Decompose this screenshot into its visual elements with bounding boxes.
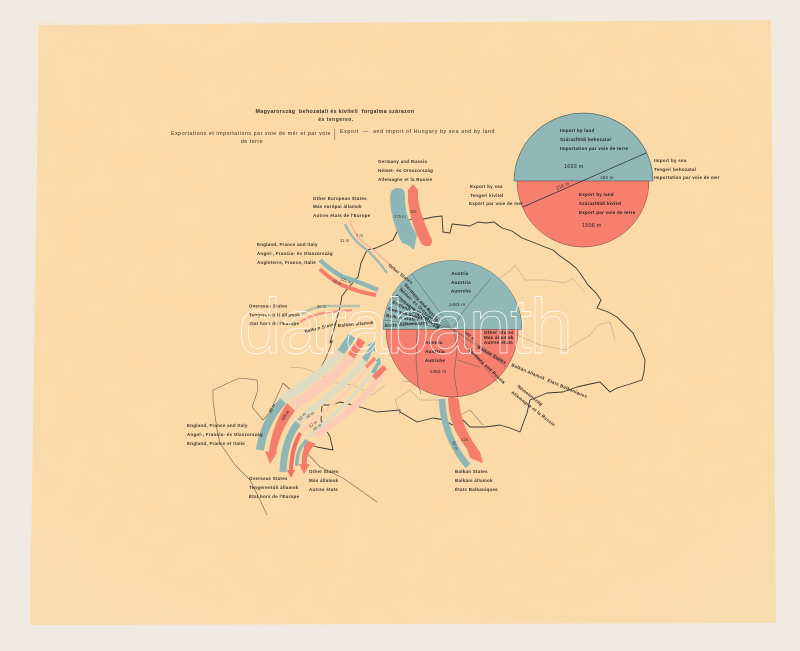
Allemagne exports radial label: Allemagne et la Russie — [510, 390, 557, 427]
title hungarian: és tengeren. — [318, 117, 354, 123]
England export — [265, 403, 295, 464]
flow values: 12 m — [308, 419, 319, 429]
Balkan States flows — [442, 397, 483, 466]
flow values: 62 m — [297, 411, 307, 422]
England, France, Italy import faded — [282, 350, 342, 400]
import flow — [442, 399, 468, 466]
label Overseas upper: Tengeren túli államok — [249, 312, 300, 318]
Balkan exports radial label: Balkán államok Etats Balkaniques — [511, 362, 588, 399]
Overseas import — [283, 423, 298, 472]
label Other States lower: Other States — [309, 469, 339, 474]
export by land label: 1506 m — [582, 223, 602, 229]
import by sea label: Tengeri behozatal — [654, 167, 696, 172]
label Other European States: Más európai államok — [313, 204, 362, 209]
export by land label: Export par voie de terre — [579, 210, 636, 215]
Austria import label — [449, 271, 471, 307]
Other States export label: Más államok — [484, 335, 514, 340]
title hungarian: Magyarország behozatali és kiviteli forgalma szárazon — [256, 109, 414, 115]
Other European States flows — [345, 220, 392, 273]
export flow — [320, 269, 376, 295]
Balkan left label: Balkan States — [304, 321, 337, 334]
flow values: 275 m — [394, 214, 406, 219]
label Overseas lower — [249, 476, 300, 499]
top arrow blue 2 — [362, 341, 375, 362]
import flow — [302, 306, 360, 314]
Overseas import faded — [297, 360, 365, 423]
Austria import label: Autriche — [451, 288, 471, 294]
map of Hungary and surroundings — [213, 216, 645, 515]
export by sea label — [469, 184, 523, 206]
import by sea label — [654, 158, 720, 180]
import by land label: Szárazföldi behozatal — [560, 137, 611, 142]
label Overseas lower: Tengerentúli államok — [249, 485, 299, 490]
label Balkan States lower: Balkáni államok — [455, 478, 493, 483]
label Other States lower: Más államok — [309, 478, 339, 483]
label Germany and Russia: Germany and Russia — [378, 159, 427, 164]
radial import labels: Etats Balkaniques — [385, 320, 428, 328]
top solid blue 1 — [341, 336, 352, 352]
import flow — [345, 224, 387, 273]
Balkan államok left label: Balkán államok — [338, 320, 374, 328]
Germany exports radial label: Németország — [516, 384, 544, 407]
lower flows solid ends — [260, 336, 385, 478]
main pie: imports from Austria and others, blue — [383, 261, 522, 330]
trade by land and sea pie — [514, 113, 653, 247]
Austria export label: Autriche — [425, 358, 445, 363]
import by sea label: Import by sea — [654, 158, 687, 163]
faded lower flows crossing the Adriatic — [282, 350, 383, 438]
title french — [171, 131, 331, 145]
radial export labels: Balkan States — [476, 345, 508, 365]
import flow — [320, 260, 378, 290]
import by sea label: Importation par voie de mer — [654, 175, 720, 180]
internal rivers — [290, 367, 385, 395]
chart content — [171, 109, 720, 515]
import by land label — [560, 128, 629, 180]
flow values: 30 m — [317, 304, 327, 309]
flow values: 45 m — [312, 422, 323, 432]
title french: de terre — [241, 139, 263, 145]
label Other European States: Other European States — [313, 196, 367, 201]
import by land label: Import by land — [560, 128, 595, 133]
radial import labels: Balkan States — [386, 313, 419, 323]
label Balkan States lower — [455, 469, 498, 492]
England, France, Italy export faded — [292, 354, 354, 407]
pie sector lines — [384, 274, 507, 397]
flow values: 85 m — [267, 402, 276, 413]
watermark darabanth: darabanth — [238, 282, 573, 370]
flow values: 151 — [410, 209, 418, 214]
label England France Italy upper: Angleterre, France, Italie — [257, 260, 316, 265]
Other States export faded — [315, 372, 383, 436]
export half — [517, 181, 649, 247]
Overseas States upper flows — [300, 306, 360, 322]
radial export labels — [463, 330, 508, 385]
England, France and Italy upper flows — [320, 260, 378, 295]
label England France Italy upper: England, France and Italy — [257, 242, 318, 247]
label England France Italy lower: Angol-, Francia- és Olaszország — [187, 432, 263, 437]
radial export labels: Germany and Russia — [467, 347, 506, 385]
export arrow to Germany and Russia, red — [408, 184, 432, 246]
Other States export — [299, 441, 316, 474]
top arrow blue 3 — [371, 357, 381, 374]
Other States import — [297, 440, 307, 466]
label Overseas upper: Overseas States — [249, 304, 288, 308]
label Germany and Russia: Allemagne et la Russie — [378, 177, 433, 182]
Austria import label: 1483 m — [449, 302, 465, 307]
Austria export label — [425, 340, 446, 374]
flow values: 7 m — [356, 233, 363, 238]
main pie labels — [385, 271, 514, 385]
top solid red 3 — [374, 367, 385, 378]
Balkan coast — [303, 443, 377, 502]
flow values: 121 m — [340, 276, 353, 285]
label England France Italy upper — [257, 242, 333, 265]
top solid red 1 — [351, 340, 362, 356]
other states upper radial label: Other States — [387, 263, 414, 285]
Other States import faded — [307, 364, 378, 438]
export by land label — [555, 181, 636, 229]
sea divider line — [523, 153, 646, 207]
export by land label: 216 m — [555, 181, 570, 191]
export by sea label: Export par voie de mer — [469, 201, 523, 206]
Other States export label — [484, 330, 514, 345]
Other States export label: Other States — [484, 330, 514, 335]
flow values: 96 m — [332, 278, 343, 286]
label Balkan States lower: Balkan States — [455, 469, 488, 474]
Other States export label: Autres états — [484, 340, 513, 345]
title french: Exportations et importations par voie de mér et par voie — [171, 131, 331, 137]
label Germany and Russia: Német- és Oroszország — [378, 168, 433, 173]
radial export labels: 162 m — [463, 330, 477, 342]
main pie: exports, red — [386, 330, 518, 397]
title english: Export — and import of Hungary by sea and by land — [340, 129, 495, 135]
label Overseas lower: État hors de l'Europe — [249, 494, 300, 499]
Overseas export faded — [302, 362, 372, 432]
label Other States lower — [309, 469, 339, 492]
export by land label: Export by land — [579, 192, 614, 197]
Austria import label: Austria — [451, 271, 469, 276]
Austria import label: Ausztria — [451, 280, 471, 285]
radial import labels: Allemagne et la Russie — [394, 293, 441, 331]
label Overseas upper: État hors de l'Europe — [249, 321, 300, 326]
radial import labels: England, France — [392, 299, 429, 321]
label Other European States — [313, 196, 371, 218]
top solid red 2 — [366, 358, 375, 367]
export flow — [448, 397, 483, 463]
label Overseas lower: Overseas States — [249, 476, 288, 481]
label England France Italy lower: England, France et Italie — [187, 441, 245, 446]
Croatian and western border — [283, 340, 333, 392]
flow values: 125 m — [280, 409, 291, 422]
label England France Italy lower: England, France and Italy — [187, 423, 248, 428]
label Overseas upper — [249, 304, 300, 326]
label England France Italy lower — [187, 423, 263, 446]
export flow — [300, 310, 352, 322]
export flow — [350, 220, 392, 267]
export by sea label: Export by sea — [470, 184, 503, 189]
Austria export label: 1382 m — [430, 369, 446, 374]
Hungarian border — [303, 216, 645, 450]
radial import labels: Német- és Oroszország — [398, 287, 442, 328]
import by land label: Importation par voie de terre — [560, 146, 629, 151]
label Other States lower: Autres états — [309, 487, 338, 492]
title hungarian — [256, 109, 414, 123]
label Other European States: Autres états de l'Europe — [313, 213, 371, 218]
flow values: 86 m — [451, 440, 460, 451]
radial import labels — [385, 282, 442, 331]
import half — [514, 113, 653, 181]
Austria export label: Ausztria — [425, 349, 445, 354]
export by sea label: Tengeri kivitel — [470, 193, 504, 198]
flow values: 124 — [461, 437, 469, 442]
label Germany and Russia — [378, 159, 433, 182]
import arrow from Germany and Russia, blue — [390, 188, 417, 250]
import by land label: 1693 m — [564, 164, 584, 170]
label England France Italy upper: Angol-, Francia- és Olaszország — [257, 251, 333, 256]
flow values — [267, 209, 469, 451]
flow values: 20 m — [305, 410, 316, 420]
Overseas export — [287, 432, 302, 478]
radial import labels: Germany and Russia — [403, 282, 440, 322]
flow values: 31 m — [340, 238, 350, 243]
England import — [260, 401, 283, 450]
export by land label: Szárazföldi kivitel — [579, 201, 622, 206]
title divider — [334, 129, 336, 140]
label Balkan States lower: États Balkaniques — [455, 487, 498, 492]
import by land label: 162 m — [600, 175, 614, 180]
Austria export label: Austria — [425, 340, 443, 345]
radial import labels: Oversea States — [388, 306, 424, 321]
Italian and Adriatic coast — [213, 378, 283, 515]
